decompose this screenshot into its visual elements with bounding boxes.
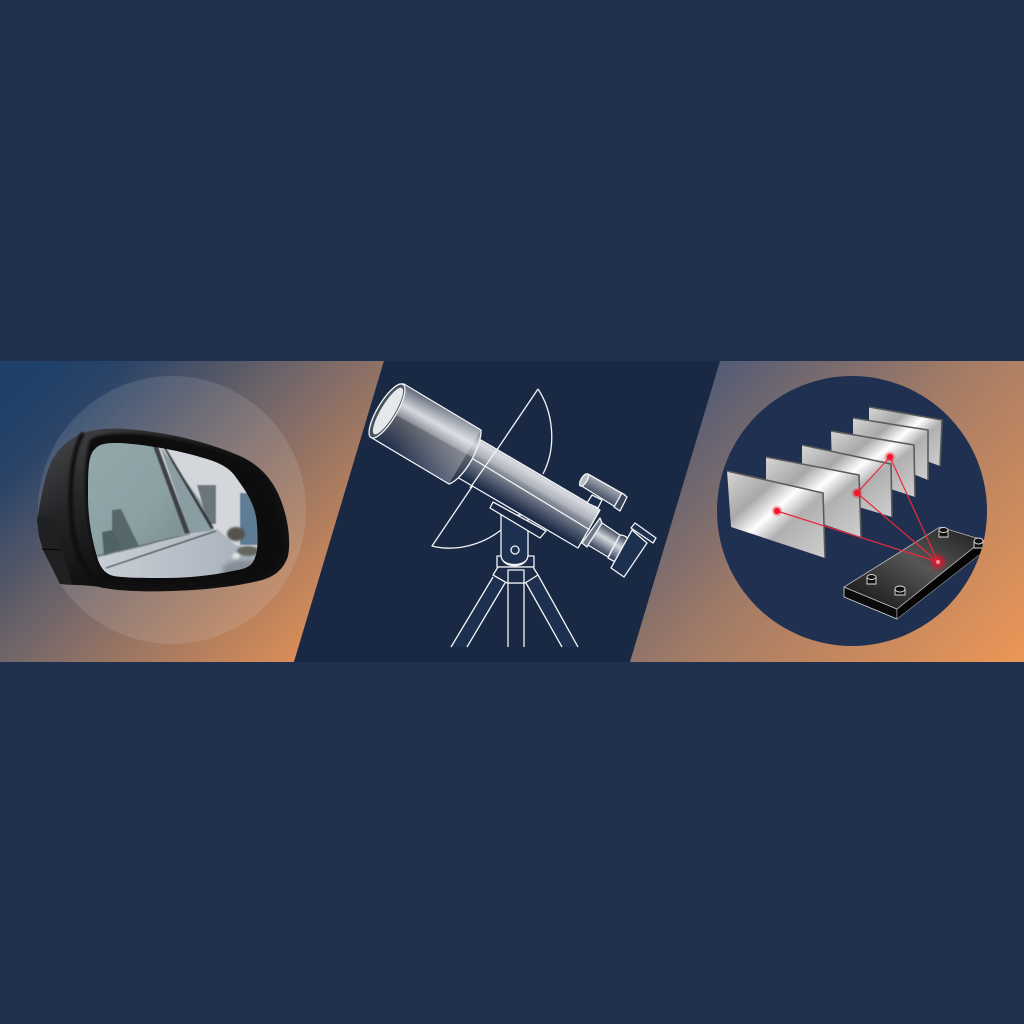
eyepiece block xyxy=(611,530,647,577)
circuit board xyxy=(844,527,983,619)
dew shield fade xyxy=(372,384,481,484)
finder rear ring xyxy=(614,493,627,511)
main tube xyxy=(457,440,600,548)
tripod head xyxy=(493,556,538,583)
mirror glass reflection xyxy=(88,443,258,578)
panel: mirror array xyxy=(630,361,1024,662)
focuser ring xyxy=(608,535,630,563)
icon: telescope line drawing xyxy=(363,380,656,647)
pivot hole xyxy=(511,546,519,554)
finder scope xyxy=(580,474,625,508)
counterweight semicircle arcs xyxy=(432,389,552,548)
navy circle xyxy=(717,376,987,646)
eyepiece cap xyxy=(631,523,656,543)
lens glass xyxy=(368,384,408,438)
laser points xyxy=(771,451,948,572)
panel: car mirror xyxy=(0,361,384,662)
pegs xyxy=(867,528,983,595)
lens opening xyxy=(363,380,411,442)
mount plate xyxy=(490,502,546,538)
tripod legs xyxy=(451,575,578,647)
infographic canvas xyxy=(0,361,1024,662)
icon: side mirror xyxy=(37,429,289,591)
finder stem xyxy=(587,495,602,508)
mirror plates xyxy=(727,407,942,558)
panel background xyxy=(0,361,384,662)
tube collar xyxy=(582,518,602,547)
finder front ring xyxy=(578,472,590,488)
dew shield xyxy=(372,384,481,484)
tube highlight line xyxy=(470,457,590,530)
board side faces xyxy=(844,587,897,619)
halo circle xyxy=(38,376,306,644)
board top xyxy=(844,527,983,609)
panel: telescope background xyxy=(294,361,720,662)
laser beams xyxy=(777,457,938,562)
mount fork xyxy=(501,515,528,564)
panel background xyxy=(630,361,1024,662)
focuser xyxy=(588,523,620,557)
semicircle line over tube xyxy=(470,448,498,488)
